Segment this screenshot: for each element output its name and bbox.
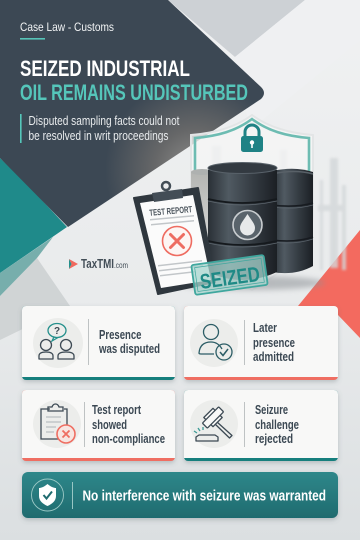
icon: gavel <box>194 407 232 441</box>
card text: Presence <box>99 328 142 342</box>
logo: TaxTMI.com: TaxTMI <box>81 256 114 271</box>
seized stamp: SEIZED <box>199 263 261 294</box>
factory silhouette <box>212 146 346 270</box>
subtitle: Disputed sampling facts could not <box>28 114 180 128</box>
back barrel <box>191 169 214 268</box>
card text: Seizure <box>255 403 288 417</box>
card text: non-compliance <box>92 432 165 446</box>
conclusion banner <box>22 472 338 518</box>
card text: challenge <box>255 418 299 432</box>
shield outline <box>191 115 313 290</box>
icon: clipboard with cross <box>41 404 75 443</box>
card: later presence admitted <box>184 306 338 380</box>
right barrel <box>272 169 313 273</box>
card text: was disputed <box>98 342 160 356</box>
card text: Test report <box>92 403 142 417</box>
title: SEIZED INDUSTRIAL <box>20 56 190 81</box>
icon: oil drop <box>233 210 262 240</box>
card text: rejected <box>255 432 293 446</box>
icon: person with check <box>199 324 232 360</box>
title: OIL REMAINS UNDISTURBED <box>20 80 248 105</box>
clip <box>152 182 183 202</box>
icon: two people and question: ? <box>54 326 60 337</box>
card text <box>98 328 160 356</box>
barrels <box>175 162 325 290</box>
card: test report non-compliance <box>22 390 175 461</box>
icon: shield with check <box>32 479 64 511</box>
card text: Later <box>253 321 277 335</box>
card text: presence <box>253 336 295 350</box>
seized stamp <box>191 255 268 295</box>
icon: padlock <box>241 125 263 152</box>
category label: Case Law - Customs <box>20 20 114 34</box>
subtitle: be resolved in writ proceedings <box>28 129 168 143</box>
card text <box>92 403 165 446</box>
clipboard: test report <box>134 182 215 294</box>
card: seizure challenge rejected <box>184 390 338 461</box>
card text <box>253 321 295 364</box>
subtitle <box>20 114 180 143</box>
card text: admitted <box>253 350 294 364</box>
teal corner shape <box>0 158 67 296</box>
dark header panel <box>0 0 264 227</box>
title <box>20 56 248 105</box>
icon: red cross <box>162 226 192 256</box>
report heading: TEST REPORT <box>149 204 193 218</box>
icon: two people and question <box>39 324 74 359</box>
logo: TaxTMI.com: .com <box>114 260 128 270</box>
main barrel <box>208 162 277 280</box>
card text <box>255 403 299 446</box>
card text: showed <box>92 418 127 432</box>
coral triangle <box>298 230 360 338</box>
card: presence was disputed <box>22 306 175 380</box>
